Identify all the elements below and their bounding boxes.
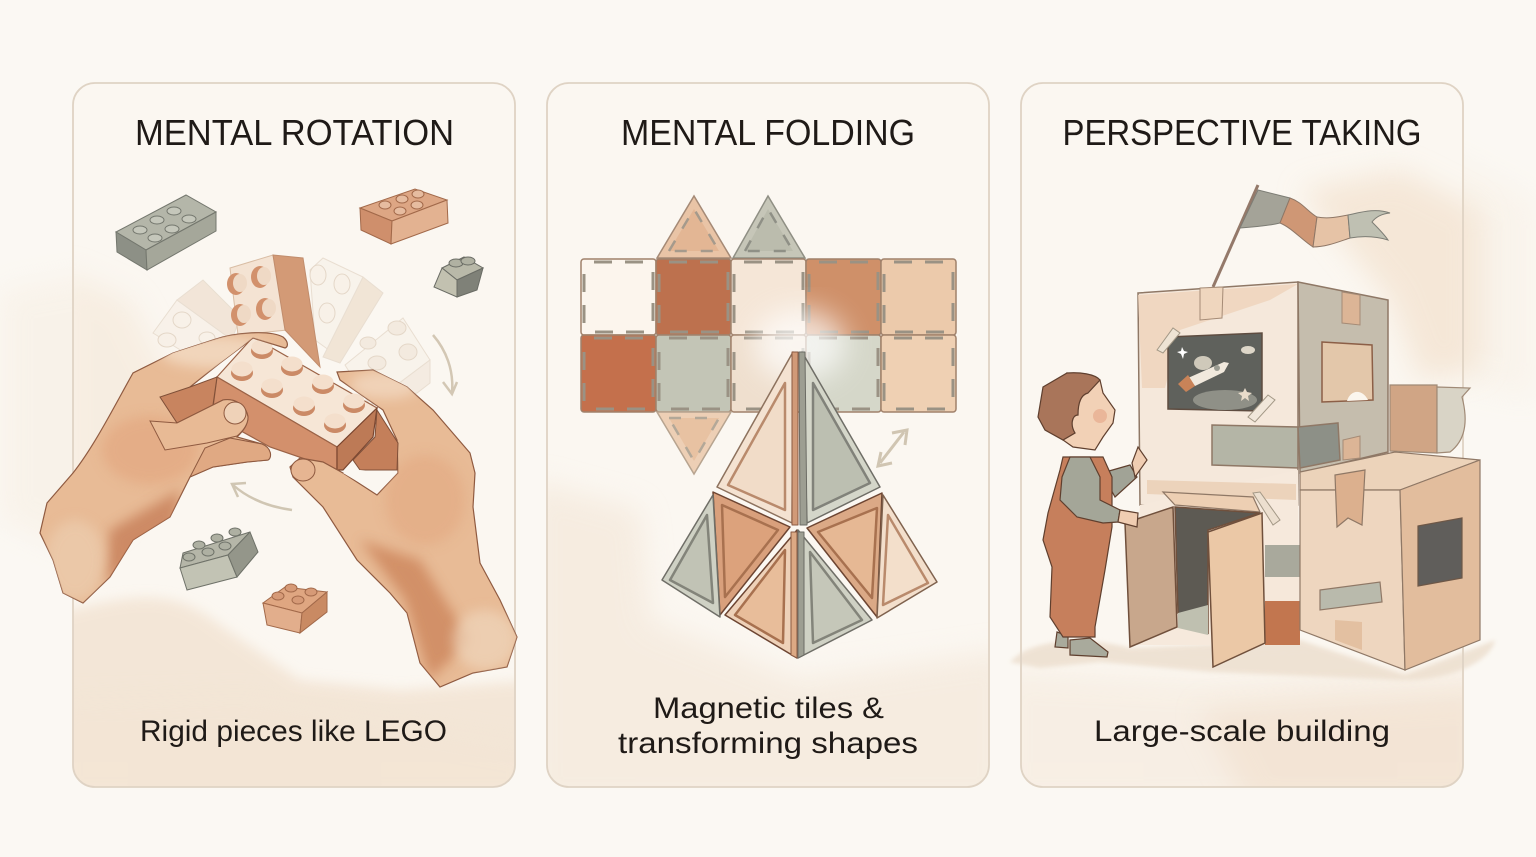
icon: grey brick top left [116,195,216,270]
far arm [1102,465,1137,497]
heading: mental rotation: MENTAL ROTATION [135,112,454,153]
cheek [1093,409,1107,423]
box: lower stripes [1265,545,1300,645]
box: top box [1138,282,1388,505]
overalls [1043,457,1112,637]
head [1063,373,1115,450]
box: doorway [1125,492,1280,667]
illustration: ghost bricks rotating [153,255,430,405]
caption: rigid pieces: Rigid pieces like LEGO [140,715,447,748]
tile: bottom triangle [657,412,731,474]
caption: large-scale building: Large-scale building [1094,715,1390,748]
arrow: curved lower [232,483,292,510]
floor wash [1010,640,1495,680]
tile: far right [877,495,937,618]
lower hand [1118,510,1138,527]
icon: orange brick top right [360,189,448,244]
icon: grey brick bottom [180,528,258,590]
box: lower wall [1130,470,1300,645]
tile: lower mid left [713,492,790,615]
tile row two [581,335,956,412]
icon: orange brick bottom [263,584,327,633]
illustration: flat net of tiles [581,196,956,474]
tile: bottom strips [791,532,804,658]
tile: bottom left [725,530,797,658]
panel: mental rotation [40,83,540,810]
heading: perspective taking: PERSPECTIVE TAKING [1062,112,1422,153]
hair [1038,373,1100,440]
icon: space window with rocket [1157,328,1275,422]
icon: small dark brick right [434,257,483,297]
arrow: double headed fold [878,430,907,466]
panel: mental folding [546,82,990,788]
tile: centre strips [792,352,807,525]
tile: far left [662,495,720,617]
box: back right box [1390,385,1470,453]
tile: lower mid right [807,493,882,617]
panel: perspective taking [1000,83,1495,810]
tile: top triangle grey [733,196,805,258]
illustration: cardboard box fort [1125,282,1480,670]
box: front right box [1300,452,1480,670]
upper hand [1132,447,1147,477]
caption: magnetic tiles: transforming shapes [618,727,918,760]
tile: upper left triangle [717,352,793,523]
illustration: central brick [212,337,377,470]
tile: top triangle orange [657,196,731,258]
illustration: child [1038,373,1147,657]
illustration: flag [1213,185,1390,287]
illustration: left hand [40,333,287,603]
illustration: magnetic pyramid [662,309,937,658]
sleeve [1060,457,1120,523]
arrow: curved right [433,335,457,394]
tile: upper right triangle [802,352,880,523]
caption: magnetic tiles: Magnetic tiles & [653,692,884,725]
illustration: right hand [290,370,517,687]
tile: bottom right [798,530,872,658]
tile row one [581,259,956,335]
feet [1055,632,1108,657]
caption: magnetic tiles [618,692,918,760]
heading: mental folding: MENTAL FOLDING [621,112,915,153]
